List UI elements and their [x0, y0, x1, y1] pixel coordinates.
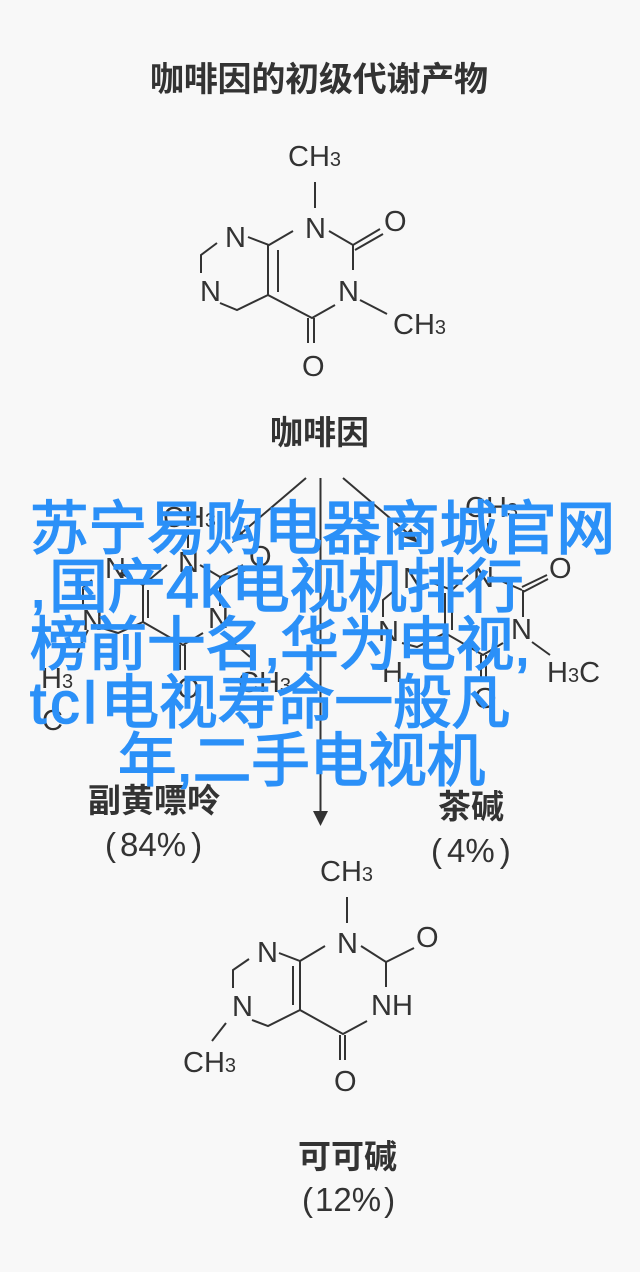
label: theophylline	[431, 788, 511, 869]
molecule: theophylline	[378, 492, 600, 715]
arrow: right branch	[343, 478, 418, 543]
molecule: caffeine: O	[384, 206, 407, 238]
molecule: theophylline: N	[403, 563, 424, 595]
molecule: theophylline: CH3	[465, 492, 518, 524]
molecule: theophylline: N	[511, 614, 532, 646]
headline overlay: 榜前十名,华为电视,	[30, 613, 531, 678]
molecule: caffeine: CH3	[393, 309, 446, 341]
molecule: theobromine: CH3	[183, 1047, 236, 1079]
molecule: theophylline: O	[474, 683, 497, 715]
molecule: caffeine: N	[225, 222, 246, 254]
label: theobromine: 可可碱	[298, 1138, 397, 1175]
headline overlay: 年,二手电视机	[118, 729, 485, 794]
label: theobromine	[298, 1138, 397, 1218]
arrow: left branch	[232, 478, 306, 543]
molecule: theobromine: O	[416, 922, 439, 954]
molecule: theobromine: N	[257, 937, 278, 969]
molecule: paraxanthine: N	[178, 547, 199, 579]
molecule: caffeine	[200, 141, 446, 383]
molecule: theophylline: N	[378, 616, 399, 648]
molecule: caffeine: N	[305, 213, 326, 245]
molecule: theobromine: O	[334, 1066, 357, 1098]
molecule: caffeine: O	[302, 351, 325, 383]
molecule: paraxanthine: CH3	[163, 502, 216, 534]
label: paraxanthine	[88, 782, 220, 863]
label: theobromine: (12%)	[302, 1181, 395, 1218]
molecule: paraxanthine: C	[42, 705, 63, 737]
molecule: paraxanthine: CH3	[238, 667, 291, 699]
molecule: theophylline: H3C	[547, 657, 600, 689]
molecule: caffeine: CH3	[288, 141, 341, 173]
label: caffeine: 咖啡因	[270, 414, 369, 451]
molecule: theophylline: N	[473, 562, 494, 594]
label: paraxanthine: (84%)	[105, 826, 202, 863]
molecule: paraxanthine: H3	[41, 663, 73, 695]
molecule: theobromine	[183, 856, 439, 1098]
label: paraxanthine: 副黄嘌呤	[88, 782, 220, 819]
molecule: paraxanthine: N	[82, 605, 103, 637]
headline overlay	[30, 497, 615, 794]
label: theophylline: 茶碱	[438, 788, 504, 825]
headline overlay: tcl电视寿命一般凡	[30, 671, 510, 736]
molecule: theobromine: N	[337, 928, 358, 960]
molecule: paraxanthine: O	[249, 541, 272, 573]
molecule: caffeine: N	[200, 276, 221, 308]
molecule: paraxanthine	[41, 502, 291, 737]
molecule: theobromine: N	[232, 991, 253, 1023]
molecule: theophylline: O	[549, 553, 572, 585]
molecule: paraxanthine: O	[177, 673, 200, 705]
molecule: caffeine: N	[338, 276, 359, 308]
molecule: theophylline: H	[382, 657, 403, 689]
label: theophylline: (4%)	[431, 832, 511, 869]
arrow: centre branch	[313, 478, 328, 826]
molecule: paraxanthine: N	[105, 553, 126, 585]
molecule: theobromine: NH	[371, 990, 413, 1022]
molecule: paraxanthine: N	[208, 603, 229, 635]
title: 咖啡因的初级代谢产物	[150, 61, 488, 99]
molecule: theobromine: CH3	[320, 856, 373, 888]
headline overlay: ,国产4k电视机排行	[30, 555, 524, 620]
headline overlay: 苏宁易购电器商城官网	[30, 497, 615, 562]
